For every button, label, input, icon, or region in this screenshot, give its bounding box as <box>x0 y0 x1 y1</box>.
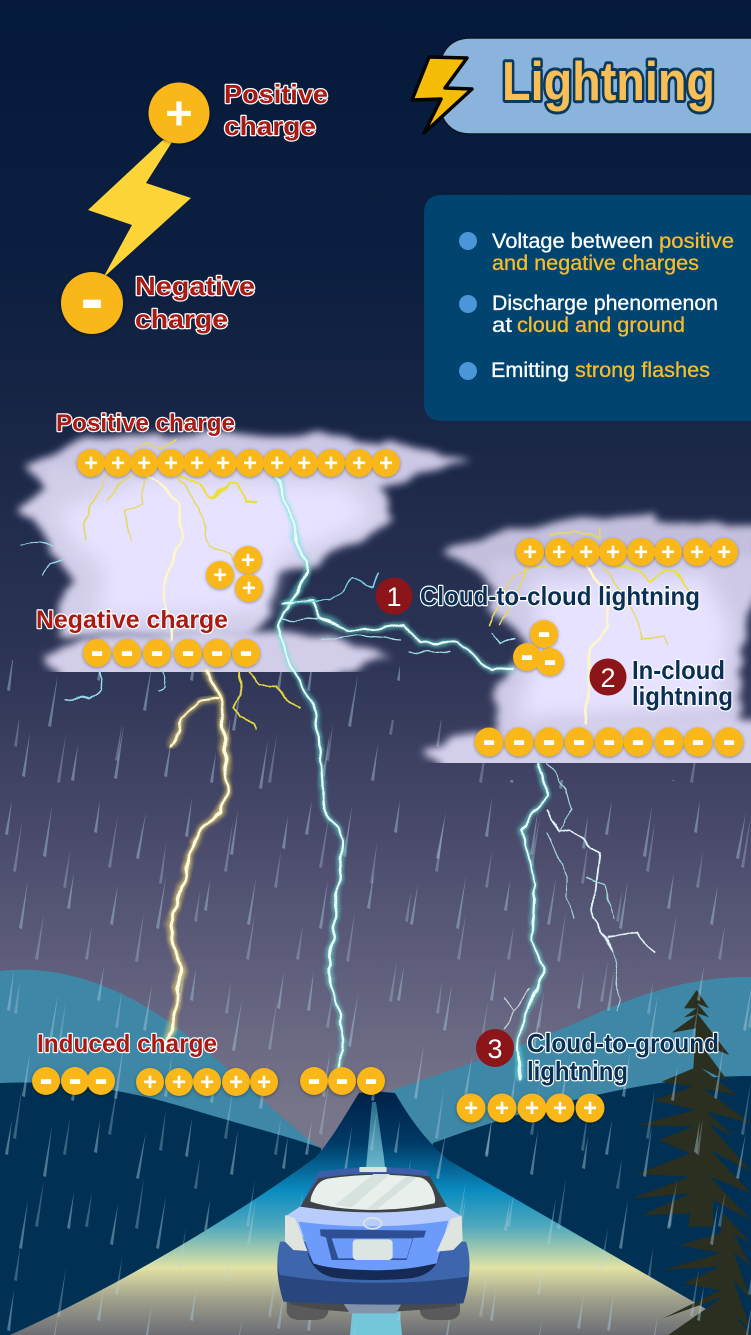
charges: left cloud positive row: + <box>297 450 311 477</box>
charges: left cloud positive cluster <box>206 546 263 602</box>
charges: right cloud negative row: - <box>602 718 616 762</box>
charges: left cloud positive row <box>77 449 400 477</box>
icon: title lightning bolt <box>412 57 472 133</box>
number badge 3 <box>476 1029 514 1067</box>
cloud bottom band <box>39 625 392 672</box>
charges: left cloud negative row <box>83 629 260 673</box>
label: lightning <box>632 681 733 711</box>
charges: right cloud negative row: - <box>631 718 645 762</box>
charges: left cloud positive row: + <box>379 450 393 477</box>
label: lightning <box>527 1056 628 1086</box>
main yellow cloud-to-ground bolt <box>166 672 227 1048</box>
big lightning bolt <box>88 140 191 278</box>
charges: right cloud positive row: + <box>606 539 620 566</box>
charges: ground positive right: + <box>464 1095 478 1122</box>
callout 2: in-cloud lightning <box>590 655 733 711</box>
title: Lightning <box>502 50 715 112</box>
label: cloud positive charge: Positive charge <box>56 410 235 437</box>
icon: car <box>277 1167 470 1320</box>
charges: right cloud negative row: - <box>722 718 736 762</box>
charges: ground negative left <box>32 1057 115 1101</box>
charges: ground negative left: - <box>68 1057 82 1101</box>
number badge 2 <box>590 658 626 696</box>
label: positive charge: charge <box>224 111 316 141</box>
fact: voltage <box>459 230 734 275</box>
yellow side branch <box>170 700 217 747</box>
number badge 1: 1 <box>386 582 402 612</box>
label: positive charge <box>224 79 328 141</box>
charges: left cloud positive row: + <box>243 450 257 477</box>
mid body <box>277 1242 470 1283</box>
label: negative charge <box>135 271 255 334</box>
charges: right cloud negative cluster: - <box>537 610 551 654</box>
charges: right cloud positive row: + <box>552 539 566 566</box>
label: Cloud-to-cloud lightning <box>420 581 700 611</box>
charges: right cloud negative cluster: - <box>520 633 534 677</box>
fact: voltage: Voltage between <box>492 230 653 253</box>
charges: right cloud positive row: + <box>579 539 593 566</box>
charges: left cloud positive row: + <box>216 450 230 477</box>
number badge 3: 3 <box>487 1034 503 1064</box>
charges: left cloud negative row: - <box>239 629 253 673</box>
window reflection <box>335 1174 417 1210</box>
charges: ground positive left: + <box>200 1069 214 1096</box>
label <box>632 655 733 711</box>
lower body <box>277 1243 469 1305</box>
charges: ground positive left: + <box>229 1069 243 1096</box>
car badge <box>364 1218 382 1229</box>
yellow in-cloud bolts, left cloud <box>83 440 255 640</box>
charges: ground positive left <box>136 1068 278 1096</box>
label <box>527 1028 719 1086</box>
charges: left cloud positive row: + <box>164 450 178 477</box>
licence plate <box>353 1239 393 1260</box>
charges: ground negative left: - <box>94 1057 108 1101</box>
fact: discharge: at <box>492 314 512 337</box>
charges: ground positive right: + <box>495 1095 509 1122</box>
fact: flashes: strong flashes <box>575 359 710 382</box>
charges: left cloud positive row: + <box>352 450 366 477</box>
charges: right cloud positive row: + <box>661 539 675 566</box>
fact: flashes <box>459 359 710 382</box>
charges: ground positive left: + <box>257 1069 271 1096</box>
right tail light <box>437 1216 463 1252</box>
charges: ground positive right: + <box>583 1095 597 1122</box>
cloud body <box>55 478 375 618</box>
charges: left cloud positive row: + <box>190 450 204 477</box>
title banner <box>412 38 751 134</box>
panel: left storm cloud <box>18 430 473 690</box>
cloud body <box>515 575 730 720</box>
rain <box>0 660 751 1335</box>
right thin branches <box>547 763 620 1012</box>
right light hill <box>388 977 751 1200</box>
negative charge circle: - <box>80 259 104 337</box>
panel: key facts <box>424 195 751 421</box>
charges: right cloud positive row: + <box>690 539 704 566</box>
charges: left cloud positive row: + <box>111 450 125 477</box>
road surface <box>10 1091 751 1335</box>
panel background <box>424 195 751 421</box>
right cloud yellow bolts <box>490 528 690 725</box>
fact: discharge: cloud and ground <box>517 314 685 337</box>
positive charge circle <box>148 82 210 144</box>
fact: discharge: Discharge phenomenon <box>492 292 718 315</box>
upper body light <box>285 1207 462 1237</box>
label: negative charge: charge <box>135 304 228 334</box>
number badge 2: 2 <box>600 663 616 693</box>
charges: ground negative centre <box>300 1057 385 1101</box>
charges: right cloud positive row <box>516 538 738 566</box>
lower tree <box>663 1213 751 1335</box>
rear panel <box>298 1221 448 1270</box>
number badge 1 <box>376 578 412 614</box>
charges: left cloud positive row: + <box>270 450 284 477</box>
bumper recess <box>307 1252 441 1280</box>
scenery: hills <box>0 970 751 1335</box>
charges: ground positive left: + <box>143 1069 157 1096</box>
charges: ground positive right: + <box>525 1095 539 1122</box>
charges: right cloud negative row <box>474 718 744 762</box>
fact: flashes: Emitting <box>491 359 569 382</box>
right dark hill <box>420 1076 751 1335</box>
charges: left cloud positive cluster: + <box>242 575 256 602</box>
legend: positive to negative charge <box>61 79 328 337</box>
plate recess <box>332 1238 413 1258</box>
left light hill <box>0 970 340 1200</box>
charges: left cloud negative row: - <box>150 629 164 673</box>
charges: right cloud negative cluster: - <box>543 638 557 682</box>
charges: right cloud negative row: - <box>691 718 705 762</box>
under bumper <box>288 1297 457 1312</box>
charges: right cloud positive row: + <box>634 539 648 566</box>
charges: left cloud positive row: + <box>84 450 98 477</box>
callout 1: cloud-to-cloud lightning <box>376 578 700 614</box>
label: Cloud-to-ground <box>527 1028 719 1058</box>
label: induced charge: Induced charge <box>37 1030 217 1058</box>
rear window glass <box>311 1175 435 1210</box>
grey ground branch <box>505 990 530 1030</box>
rear window frame <box>300 1173 447 1214</box>
charges: right cloud positive row: + <box>717 539 731 566</box>
right cyan cloud-to-ground bolt <box>517 763 548 1078</box>
cloud-to-cloud upper branch <box>293 573 378 603</box>
left tail light <box>285 1215 307 1251</box>
icon: pine tree <box>632 990 751 1335</box>
banner pill <box>437 38 751 134</box>
lightning bolts <box>20 440 690 1078</box>
panel: right storm cloud <box>420 517 751 790</box>
fact: voltage: positive <box>659 230 734 253</box>
negative charge circle <box>61 259 123 337</box>
charges: right cloud negative cluster <box>513 610 564 682</box>
left dark hill <box>0 1082 330 1335</box>
charges: right cloud negative row: - <box>662 718 676 762</box>
roof spoiler light <box>359 1167 387 1172</box>
tires <box>287 1300 460 1320</box>
cloud halo: top band <box>23 430 473 505</box>
charges: right cloud negative row: - <box>542 718 556 762</box>
left cloud cyan wisps <box>20 540 165 700</box>
heavy rain streaks <box>0 720 751 1335</box>
plate recess frame <box>320 1229 426 1260</box>
charges: left cloud negative row: - <box>210 629 224 673</box>
cloud bottom band <box>419 714 751 763</box>
cloud-to-cloud small branches <box>280 617 515 652</box>
charges: ground negative left: - <box>39 1057 53 1101</box>
fact: discharge <box>459 292 718 337</box>
charges: left cloud positive row: + <box>137 450 151 477</box>
road with headlight glow <box>10 1091 751 1335</box>
charges: left cloud negative row: - <box>120 629 134 673</box>
upper tree <box>632 990 751 1227</box>
label: negative charge: Negative <box>135 271 255 301</box>
label: cloud negative charge: Negative charge <box>36 606 228 634</box>
charges: ground negative centre: - <box>364 1057 378 1101</box>
charges: left cloud negative row: - <box>181 629 195 673</box>
label: In-cloud <box>632 655 725 685</box>
fine rain streaks <box>0 660 751 1335</box>
cloud halo: body <box>490 555 751 735</box>
callout 3: cloud-to-ground lightning <box>476 1028 719 1086</box>
charges: left cloud positive cluster: + <box>213 562 227 589</box>
charges: left cloud positive cluster: + <box>241 547 255 574</box>
charges: left cloud positive row: + <box>324 450 338 477</box>
rear diffuser <box>343 1303 402 1313</box>
charges: right cloud negative row: - <box>512 718 526 762</box>
charges: ground positive right <box>456 1094 604 1122</box>
charges: right cloud negative row: - <box>572 718 586 762</box>
yellow branches below left cloud <box>235 672 302 730</box>
roof <box>300 1167 447 1207</box>
charges: ground negative centre: - <box>307 1057 321 1101</box>
charges: left cloud negative row: - <box>90 629 104 673</box>
charges: ground positive right: + <box>553 1095 567 1122</box>
label: positive charge: Positive <box>224 79 328 109</box>
cloud-to-cloud bolt <box>283 600 513 672</box>
charges: right cloud positive row: + <box>523 539 537 566</box>
cloud halo: top band <box>445 517 751 590</box>
main cyan bolt <box>277 478 345 1075</box>
cloud halo: body <box>18 470 394 636</box>
charges: ground negative centre: - <box>335 1057 349 1101</box>
road centre line <box>350 1102 402 1335</box>
right cyan branch <box>547 812 653 952</box>
charges: right cloud negative row: - <box>482 718 496 762</box>
positive charge circle: + <box>165 86 193 139</box>
charges: ground positive left: + <box>172 1069 186 1096</box>
fact: voltage: and negative charges <box>492 252 699 275</box>
